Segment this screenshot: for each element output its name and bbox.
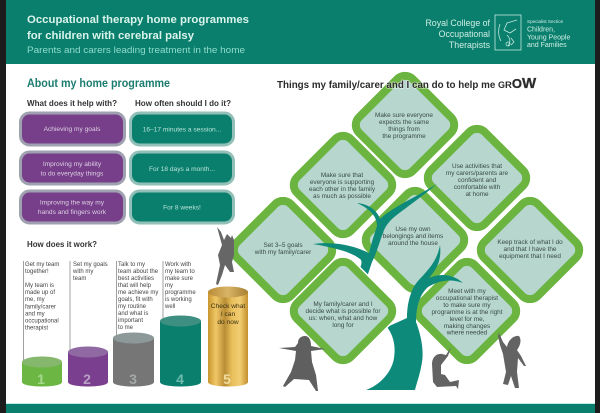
step 3 text: that will help [118, 283, 152, 289]
organisation name [425, 18, 491, 50]
tree trunk [366, 245, 463, 390]
step 3 text: team about the [118, 269, 159, 275]
step 1 text: therapist [25, 326, 48, 332]
cylinder 5: do now [217, 319, 239, 326]
header banner [6, 0, 595, 64]
step 3 text: best activities [118, 276, 154, 282]
panel: help-with buttons: Achieving my goals [44, 126, 101, 133]
specialist section name: Children, [527, 26, 555, 34]
diamond: keep track: equipment that I need [499, 253, 561, 260]
diamond: goals: with my family/carer [254, 249, 312, 256]
title [27, 14, 249, 42]
child: sitting [432, 347, 459, 389]
child: arms out [279, 336, 325, 391]
step 4 text: is working [165, 297, 192, 303]
diamond: meet: making changes [444, 323, 490, 330]
tree upper branches [313, 184, 437, 277]
diamond: meet: where needed [446, 330, 488, 336]
step 3 text: my routine [118, 304, 147, 310]
step 1 text: and my [25, 312, 45, 318]
diamond: activities: comfortable with [454, 184, 501, 191]
step 4 text: programme [165, 290, 196, 296]
step 1 text: me, my [25, 297, 45, 303]
step 2 text [72, 262, 108, 282]
panel: help-with buttons: to do everyday things [41, 170, 104, 178]
panel: how-often buttons: For 18 days a month... [149, 166, 215, 173]
cylinder 4: 4 [176, 371, 184, 387]
step 3 text: goals, fit with [118, 297, 153, 303]
diamond texts [254, 112, 563, 336]
diamond: activities: Use activities that [452, 163, 502, 170]
diamond: belongings: Use my own [395, 226, 431, 233]
diamond: same things: expects the same [379, 119, 429, 126]
diamond: goals: Set 3–5 goals [263, 242, 303, 249]
heading: things to help me grow: Things my family/carer and I can do to help me GROW [277, 75, 537, 92]
diamond: decide [306, 301, 381, 329]
panel: how-often buttons: 16–17 minutes a session... [143, 126, 221, 134]
cylinder 2: 2 [83, 371, 91, 387]
cylinder 1: 1 [37, 371, 45, 387]
cylinder 5: Check what [211, 303, 245, 310]
cylinder 4 [160, 316, 201, 387]
diamond: same things: the programme [382, 133, 426, 140]
specialist section name [527, 19, 570, 49]
diamond: supporting each other: Make sure that [321, 172, 363, 179]
step 1 text: Get my team [25, 262, 59, 268]
step 2 text: team [73, 276, 86, 282]
cylinder 2 [68, 346, 108, 387]
step 3 text: important [118, 318, 143, 324]
panel: how-often buttons: For 8 weeks! [163, 204, 201, 212]
step 4 text: Work with [165, 262, 191, 268]
step 1 text: made up of [25, 290, 55, 296]
diamond: supporting each other: as much as possible [313, 193, 371, 200]
cylinder 5: I can [221, 311, 235, 318]
step 3 text: Talk to my [118, 262, 145, 268]
cylinder 3 [113, 332, 154, 387]
cylinder 3: 3 [129, 371, 137, 387]
diamond: goals [254, 242, 312, 256]
panel: help-with buttons: Improving my ability [43, 161, 102, 168]
diamond: meet: Meet with my [448, 288, 487, 295]
title: Occupational therapy home programmes [27, 14, 249, 26]
diamond: supporting each other: each other in the family [309, 186, 376, 193]
diamond: meet: level for me, [450, 316, 485, 323]
diamond: keep track: Keep track of what I do [497, 239, 563, 246]
step 4 text: well [164, 304, 175, 310]
cylinder 1 [22, 356, 62, 387]
logo crest [495, 15, 521, 50]
diamond: same things: Make sure everyone [375, 112, 433, 119]
step 4 text: my team to [165, 269, 195, 275]
cylinder 5 [208, 286, 248, 387]
panel: help-with buttons: Improving the way my [40, 200, 105, 206]
step 1 text: family/carer [25, 304, 56, 310]
cylinder 5: 5 [223, 371, 231, 387]
step 4 text [164, 262, 196, 310]
heading: what does it help with: What does it help with? [27, 98, 117, 108]
diamond: belongings: belongings and items [383, 233, 443, 240]
step 3 text: and what is [118, 311, 148, 317]
diamond: decide: decide what is possible for [306, 308, 381, 315]
diamond: belongings: around the house [388, 240, 438, 247]
diamond: decide: us: when, what and how [309, 315, 378, 322]
diamond: belongings [383, 226, 443, 247]
step 3 text: to me [118, 325, 134, 331]
diamond: decide: My family/carer and I [313, 301, 373, 308]
panel: help-with buttons [20, 113, 124, 223]
step columns: text and leader lines [24, 261, 196, 362]
organisation name: Royal College of [425, 18, 491, 28]
diamond: decide: long for [332, 322, 355, 329]
bottom bar [6, 403, 595, 413]
heading: how often: How often should I do it? [135, 98, 231, 108]
step 3 text [118, 262, 159, 331]
step 2 text: Set my goals [73, 262, 108, 268]
diamond: keep track: and that I have the [504, 246, 557, 253]
step 4 text: my [165, 283, 173, 289]
step 1 text [25, 262, 59, 332]
heading: about my home programme: About my home programme [27, 78, 170, 90]
specialist section name: and Families [527, 42, 567, 49]
title: for children with cerebral palsy [27, 30, 195, 42]
specialist section name: Specialist Section [527, 19, 564, 24]
diamond: activities [446, 163, 509, 198]
heading: how does it work: How does it work? [27, 239, 97, 249]
step 2 text: with my [72, 269, 93, 275]
diamond: same things: things from [388, 126, 420, 133]
diamond: same things [375, 112, 433, 140]
organisation name: Therapists [449, 40, 491, 50]
specialist section name: Young People [527, 34, 570, 42]
diamond: activities: at home [465, 191, 489, 198]
step 1 text: My team is [25, 283, 54, 289]
panel: help-with buttons: hands and fingers work [38, 209, 107, 216]
diamond: meet [431, 288, 503, 336]
diamond: activities: confident and [458, 177, 497, 184]
diamond: supporting each other [309, 172, 376, 200]
diamond: activities: my carers/parents are [446, 170, 509, 177]
subtitle: Parents and carers leading treatment in the home [27, 45, 245, 56]
panel: how-often buttons [130, 113, 234, 223]
step 1 text: together! [25, 269, 49, 275]
step 4 text: make sure [165, 276, 194, 282]
step 1 text: occupational [25, 318, 59, 324]
diamond: keep track [497, 239, 563, 260]
diamond: lower left [289, 257, 397, 365]
diamond: meet: to make sure my [443, 302, 491, 309]
child: standing [498, 333, 526, 388]
child: jumping [216, 227, 234, 285]
diamond: meet: occupational therapist [436, 295, 498, 302]
diamond: supporting each other: everyone is supporting [310, 179, 375, 186]
step 3 text: me achieve my [118, 290, 158, 296]
diamond: meet: programme is at the right [431, 309, 503, 316]
diamonds [229, 71, 584, 365]
organisation name: Occupational [439, 29, 490, 39]
